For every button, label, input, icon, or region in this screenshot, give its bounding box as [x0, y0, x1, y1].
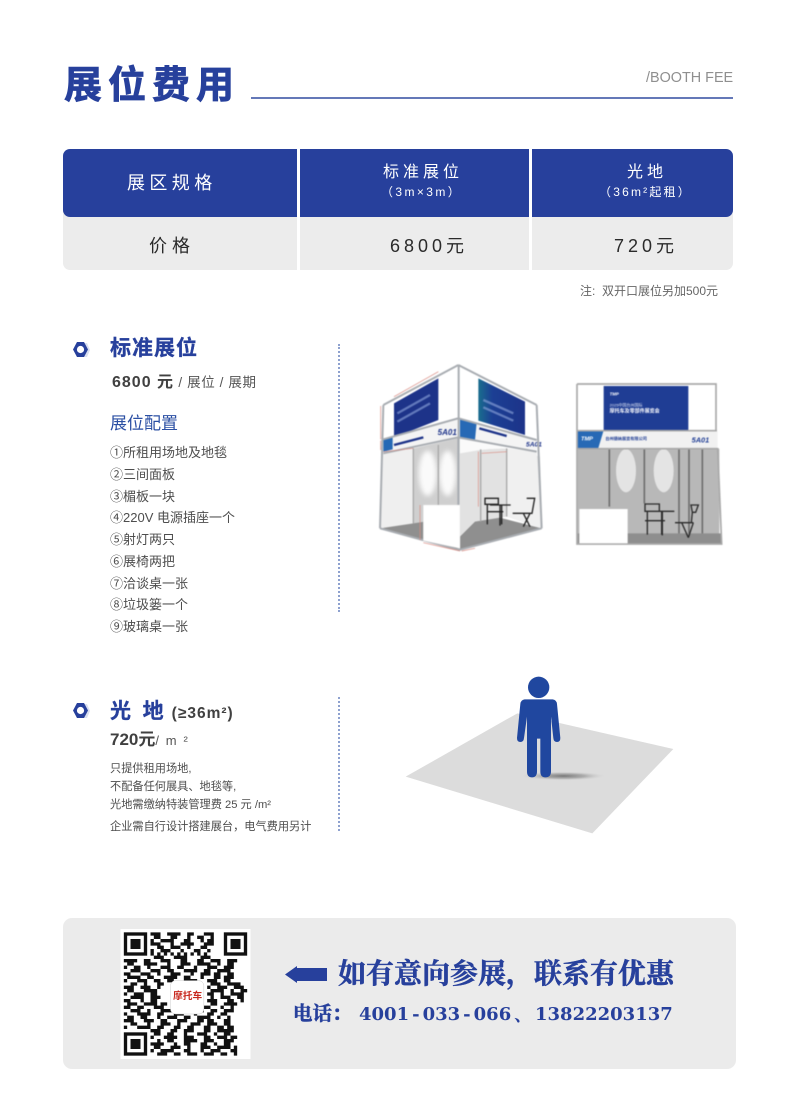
price: standard booth: 6800元	[390, 236, 468, 256]
header: area spec	[63, 149, 297, 217]
phone numbers	[293, 1003, 673, 1025]
price: standard booth	[300, 209, 529, 270]
booth illustration: corner view: 5A01	[438, 428, 457, 437]
raw space description	[110, 762, 311, 833]
header: area spec: 展区规格	[127, 173, 217, 193]
booth illustration: front view: 2025中国台州国际	[610, 401, 643, 407]
raw space price: 720元/ m ²	[110, 730, 189, 749]
standard booth price: 6800 元 / 展位 / 展期	[112, 374, 257, 391]
price: raw space	[532, 209, 733, 270]
configuration list: ③楣板一块	[110, 489, 175, 504]
header: raw space: 光地	[627, 164, 667, 181]
header: standard booth: （3m×3m）	[381, 185, 462, 199]
heading: raw space: 光 地 (≥36m²)	[110, 700, 234, 723]
booth illustration: front view: 台州德纳展览有限公司	[605, 435, 647, 441]
icon: hexagon standard booth	[73, 342, 90, 357]
call to action: 如有意向参展，联系有优惠	[338, 959, 674, 990]
qr code	[120, 929, 250, 1059]
person	[517, 677, 560, 777]
configuration list: ⑥展椅两把	[110, 554, 175, 569]
header: standard booth: 标准展位	[383, 164, 463, 181]
configuration list: ②三间面板	[110, 467, 175, 482]
illustration: person on floor	[406, 676, 673, 834]
booth illustration: front view	[576, 382, 723, 546]
booth illustration: front view: TMP	[581, 436, 593, 442]
configuration list: ⑧垃圾篓一个	[110, 597, 188, 612]
booth illustration: corner view: 5A01	[526, 442, 542, 449]
header: raw space	[532, 149, 733, 217]
raw space description: 光地需缴纳特装管理费 25 元 /m²	[110, 799, 271, 811]
title rule	[251, 97, 733, 99]
dotted divider lower	[338, 697, 340, 831]
configuration list: ④220V 电源插座一个	[110, 510, 235, 525]
configuration list	[110, 445, 235, 634]
booth illustration: corner view	[378, 364, 544, 552]
phone numbers: 、	[514, 1005, 532, 1025]
phone numbers: 4001-033-066	[359, 1004, 511, 1025]
booth illustration: front view: TMP	[610, 391, 619, 396]
raw space description: 不配备任何展具、地毯等,	[110, 781, 236, 793]
raw space description: 只提供租用场地,	[110, 763, 191, 775]
configuration list: ①所租用场地及地毯	[110, 445, 227, 460]
price table	[63, 149, 733, 270]
raw space description: 企业需自行设计搭建展台，电气费用另计	[110, 821, 311, 833]
qr code: 摩托车	[173, 990, 202, 1002]
icon: hexagon raw space	[73, 703, 90, 718]
subheading: booth configuration: 展位配置	[110, 414, 178, 433]
table note: 注: 双开口展位另加500元	[580, 284, 718, 298]
english subtitle: /BOOTH FEE	[646, 70, 733, 86]
header: raw space: （36m²起租）	[599, 185, 692, 199]
dotted divider upper	[338, 344, 340, 612]
contact panel	[63, 918, 736, 1069]
phone numbers: 13822203137	[535, 1004, 673, 1025]
arrow: points to qr code	[285, 966, 327, 983]
heading: standard booth: 标准展位	[110, 337, 198, 360]
row label: price	[63, 209, 297, 270]
configuration list: ⑨玻璃桌一张	[110, 619, 188, 634]
title: 展位费用	[64, 65, 240, 107]
row label: price: 价格	[149, 236, 195, 256]
floor	[406, 713, 673, 833]
configuration list: ⑦洽谈桌一张	[110, 576, 188, 591]
price: raw space: 720元	[614, 236, 678, 256]
shadow	[520, 771, 607, 781]
phone numbers: 电话：	[293, 1004, 352, 1025]
header: standard booth	[300, 149, 529, 217]
booth illustration: front view: 摩托车及零部件展览会	[610, 408, 660, 415]
booth illustration: front view: 5A01	[692, 436, 709, 445]
configuration list: ⑤射灯两只	[110, 532, 175, 547]
